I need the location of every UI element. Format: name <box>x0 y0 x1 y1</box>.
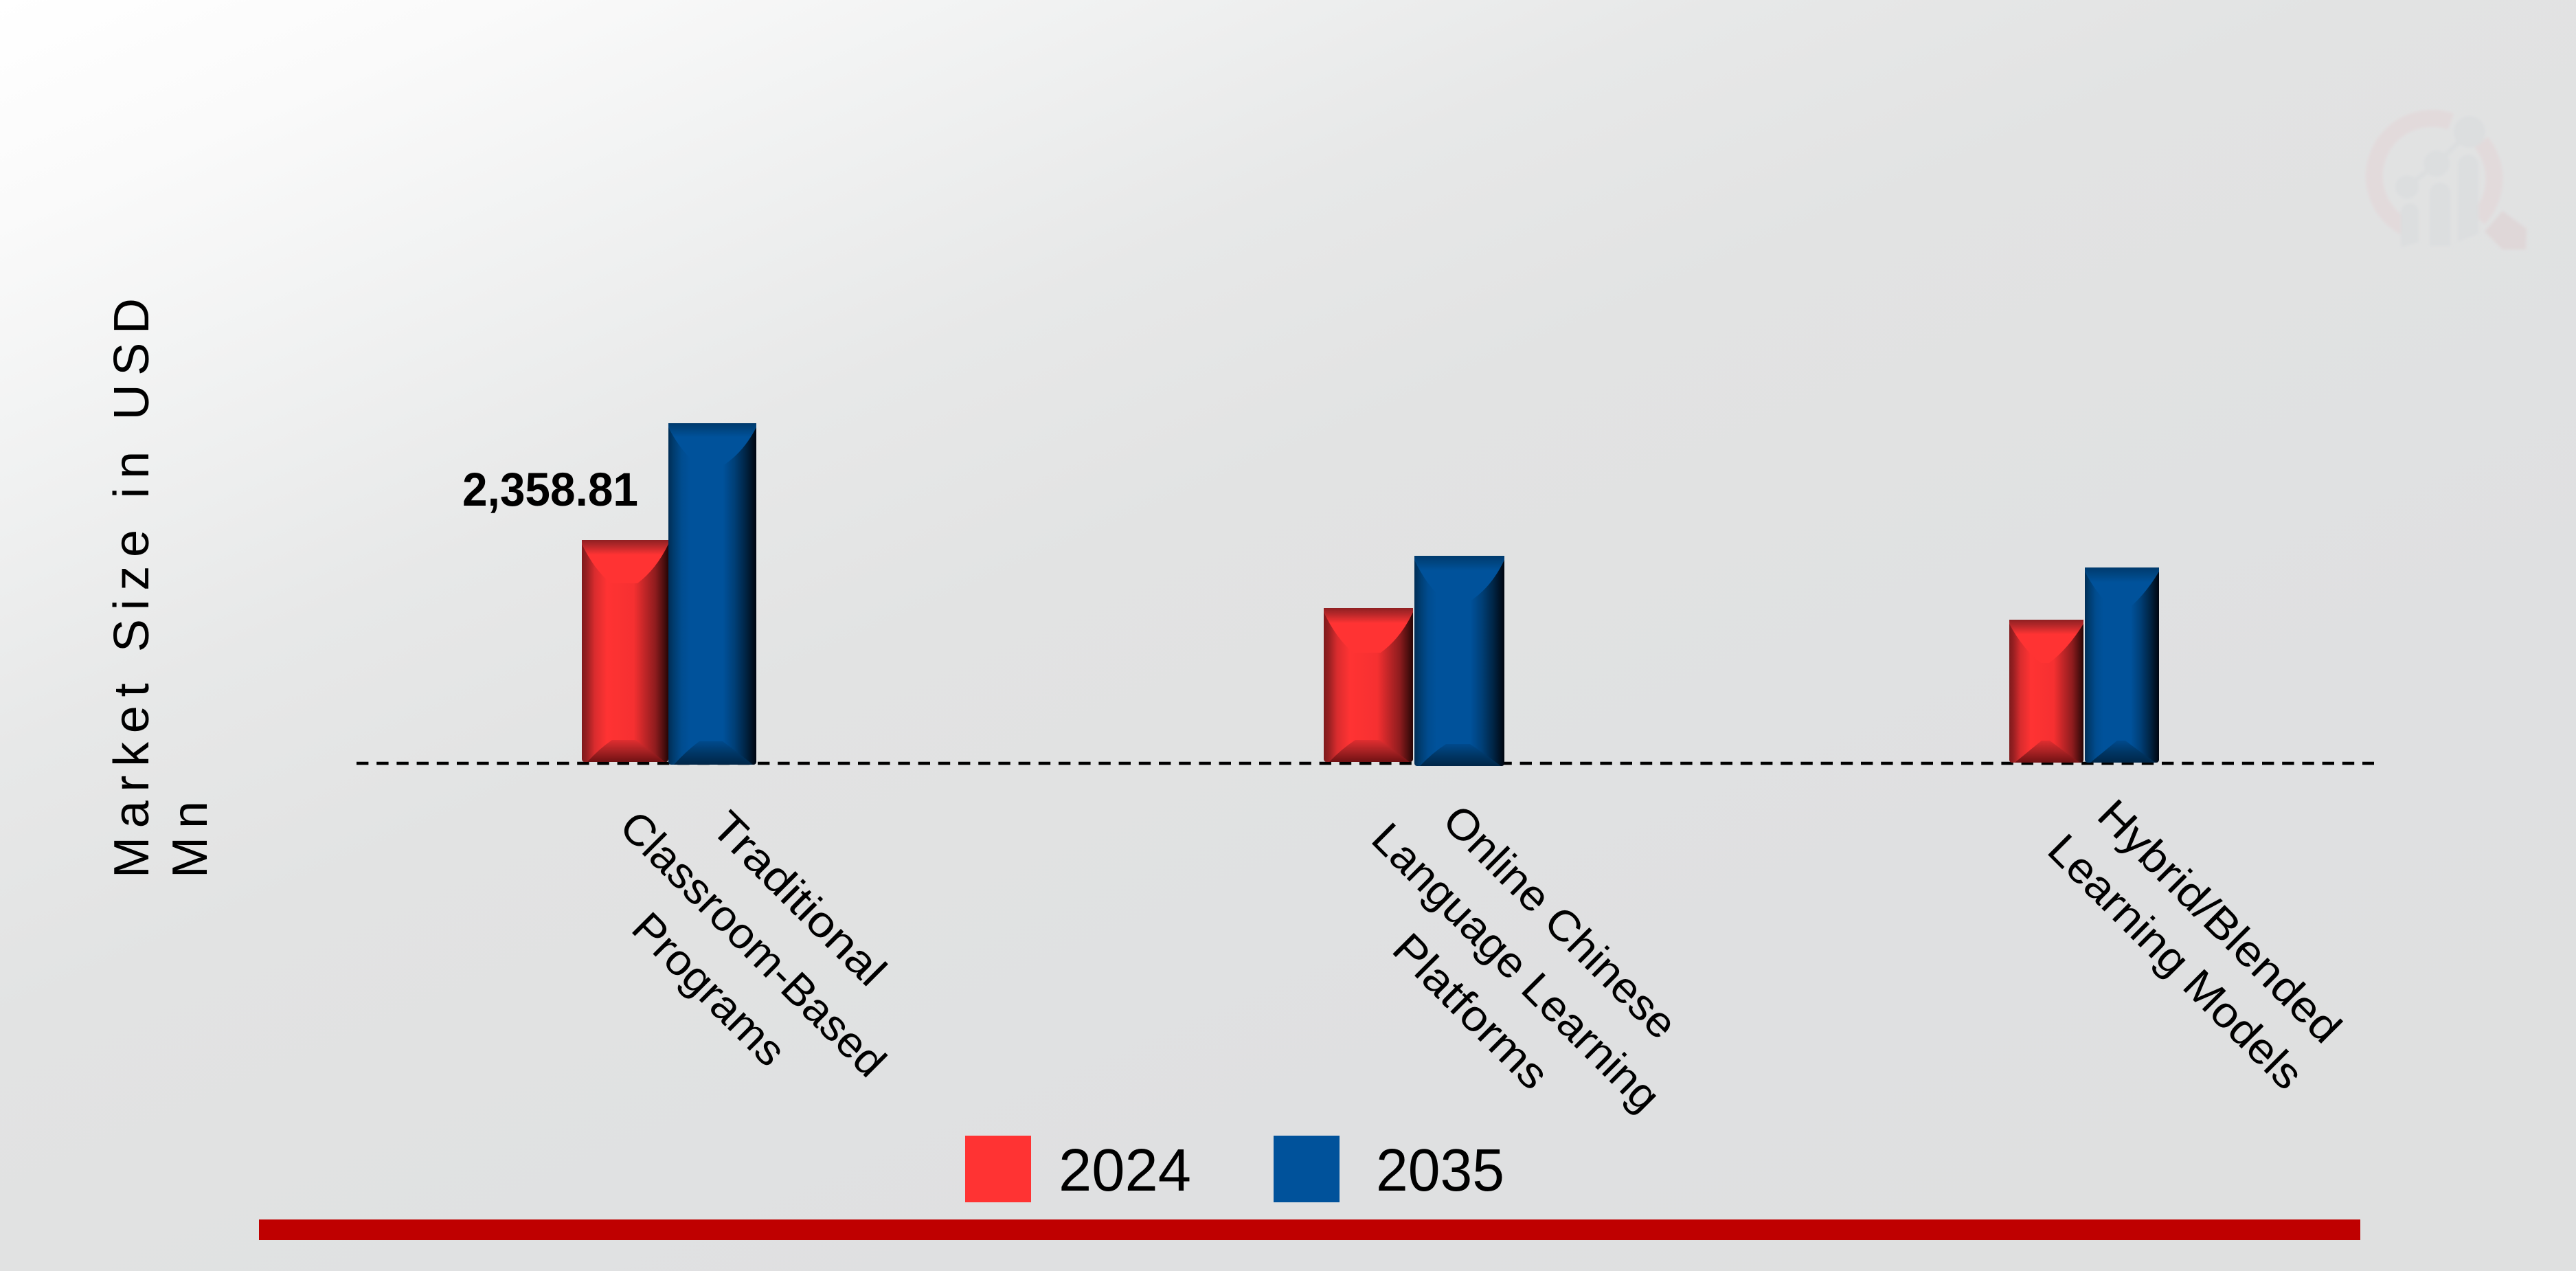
category label: Traditional Classroom-Based Programs: Programs <box>622 903 795 1076</box>
category label: Traditional Classroom-Based Programs: Traditional <box>702 802 896 996</box>
legend label 2024: 2024 <box>1059 1137 1191 1204</box>
icon: watermark logo <box>2374 116 2527 249</box>
category label: Traditional Classroom-Based Programs: Classroom-Based <box>611 802 895 1086</box>
y-axis title: Market Size in USD <box>104 298 159 878</box>
y-axis title: Mn <box>163 801 218 878</box>
bar: Traditional 2035 <box>668 423 756 765</box>
category label: Online Chinese Language Learning Platforms: Language Learning <box>1362 814 1669 1121</box>
category label: Online Chinese Language Learning Platforms: Platforms <box>1383 924 1558 1099</box>
category label: Hybrid/Blended Learning Models: Learning Models <box>2038 825 2312 1099</box>
bar: Online 2024 <box>1324 608 1413 762</box>
legend <box>965 1136 1504 1204</box>
legend swatch 2035 <box>1274 1136 1340 1202</box>
bar: Hybrid 2024 <box>2009 620 2083 763</box>
y-axis title <box>104 298 218 878</box>
legend label 2035: 2035 <box>1376 1137 1504 1204</box>
bar: Hybrid 2035 <box>2085 567 2159 763</box>
category label: Online Chinese Language Learning Platforms: Online Chinese <box>1434 796 1686 1048</box>
bar: Online 2035 <box>1414 556 1504 766</box>
footer red bar <box>259 1219 2360 1240</box>
category label: Hybrid/Blended Learning Models: Hybrid/Blended <box>2088 790 2351 1053</box>
bar: Traditional 2024 <box>582 540 668 762</box>
legend swatch 2024 <box>965 1136 1031 1202</box>
baseline axis <box>357 762 2374 765</box>
value label: 2,358.81 <box>462 463 638 516</box>
